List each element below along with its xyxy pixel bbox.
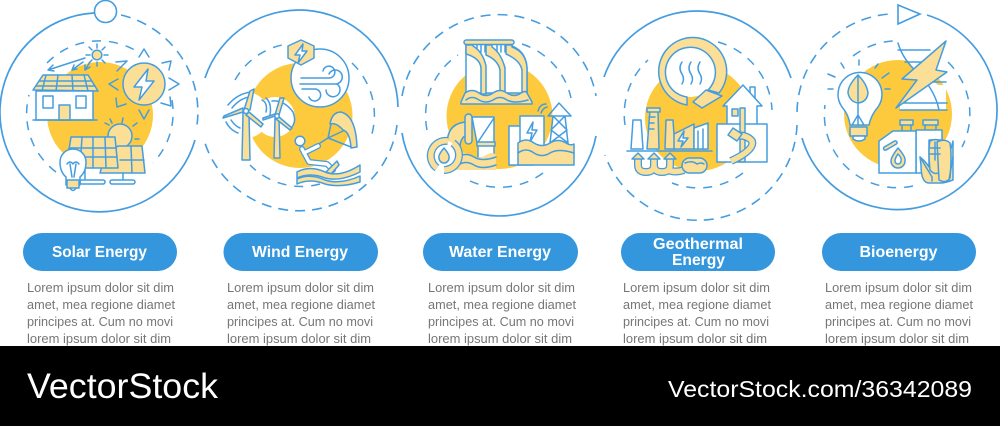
pill: geothermal energy: Energy — [672, 252, 725, 269]
text: geothermal description — [623, 280, 771, 346]
panel: solar energy — [0, 0, 198, 346]
text: bioenergy description: lorem ipsum dolor sit dim — [825, 331, 969, 346]
text: wind description: lorem ipsum dolor sit dim — [227, 331, 371, 346]
text: geothermal description: principes at. Cum no movi — [623, 314, 769, 329]
text: wind description — [227, 280, 375, 346]
text: solar description: amet, mea regione diamet — [27, 297, 175, 312]
text: bioenergy description: Lorem ipsum dolor sit dim — [825, 280, 972, 295]
pill: geothermal energy: Geothermal — [653, 236, 743, 253]
pill: bioenergy — [822, 233, 976, 271]
icon: hydro dam, pump and pylon — [431, 40, 574, 170]
text: geothermal description: Lorem ipsum dolor sit dim — [623, 280, 770, 295]
text: wind description: Lorem ipsum dolor sit dim — [227, 280, 374, 295]
text: geothermal description: amet, mea regione diamet — [623, 297, 771, 312]
footer band — [0, 346, 1000, 426]
text: water description: principes at. Cum no movi — [428, 314, 574, 329]
text: water description: Lorem ipsum dolor sit dim — [428, 280, 575, 295]
pill: wind energy: Wind Energy — [252, 244, 348, 261]
text: solar description — [27, 280, 175, 346]
footer band: VectorStock — [27, 367, 219, 406]
icon: solar house and panels — [33, 44, 179, 190]
icon: geothermal plant and house — [627, 37, 767, 173]
pill: water energy — [423, 233, 578, 271]
text: bioenergy description: principes at. Cum no movi — [825, 314, 971, 329]
pill: wind energy — [224, 233, 378, 271]
text: wind description: amet, mea regione diamet — [227, 297, 375, 312]
text: solar description: principes at. Cum no movi — [27, 314, 173, 329]
pill: solar energy: Solar Energy — [52, 244, 147, 261]
pill: water energy: Water Energy — [449, 244, 551, 261]
icon: bulb, DNA, fuel cans and corn — [828, 41, 953, 183]
text: geothermal description: lorem ipsum dolor sit dim — [623, 331, 767, 346]
panel: wind energy — [204, 10, 398, 346]
text: solar description: lorem ipsum dolor sit dim — [27, 331, 171, 346]
text: water description: amet, mea regione diamet — [428, 297, 576, 312]
footer band: VectorStock.com/36342089 — [668, 376, 972, 402]
pill: geothermal energy — [621, 233, 775, 271]
icon: wind turbines and kitesurfer — [223, 40, 360, 186]
pill: bioenergy: Bioenergy — [860, 244, 938, 261]
panel: water energy — [402, 15, 596, 346]
text: wind description: principes at. Cum no movi — [227, 314, 373, 329]
pill: solar energy — [23, 233, 177, 271]
text: bioenergy description — [825, 280, 973, 346]
text: water description — [428, 280, 576, 346]
marker: start circle — [94, 0, 116, 22]
marker: end triangle — [898, 5, 920, 24]
panel: geothermal energy — [604, 11, 797, 346]
text: water description: lorem ipsum dolor sit dim — [428, 331, 572, 346]
text: solar description: Lorem ipsum dolor sit dim — [27, 280, 174, 295]
text: bioenergy description: amet, mea regione diamet — [825, 297, 973, 312]
panel: bioenergy — [797, 5, 997, 346]
